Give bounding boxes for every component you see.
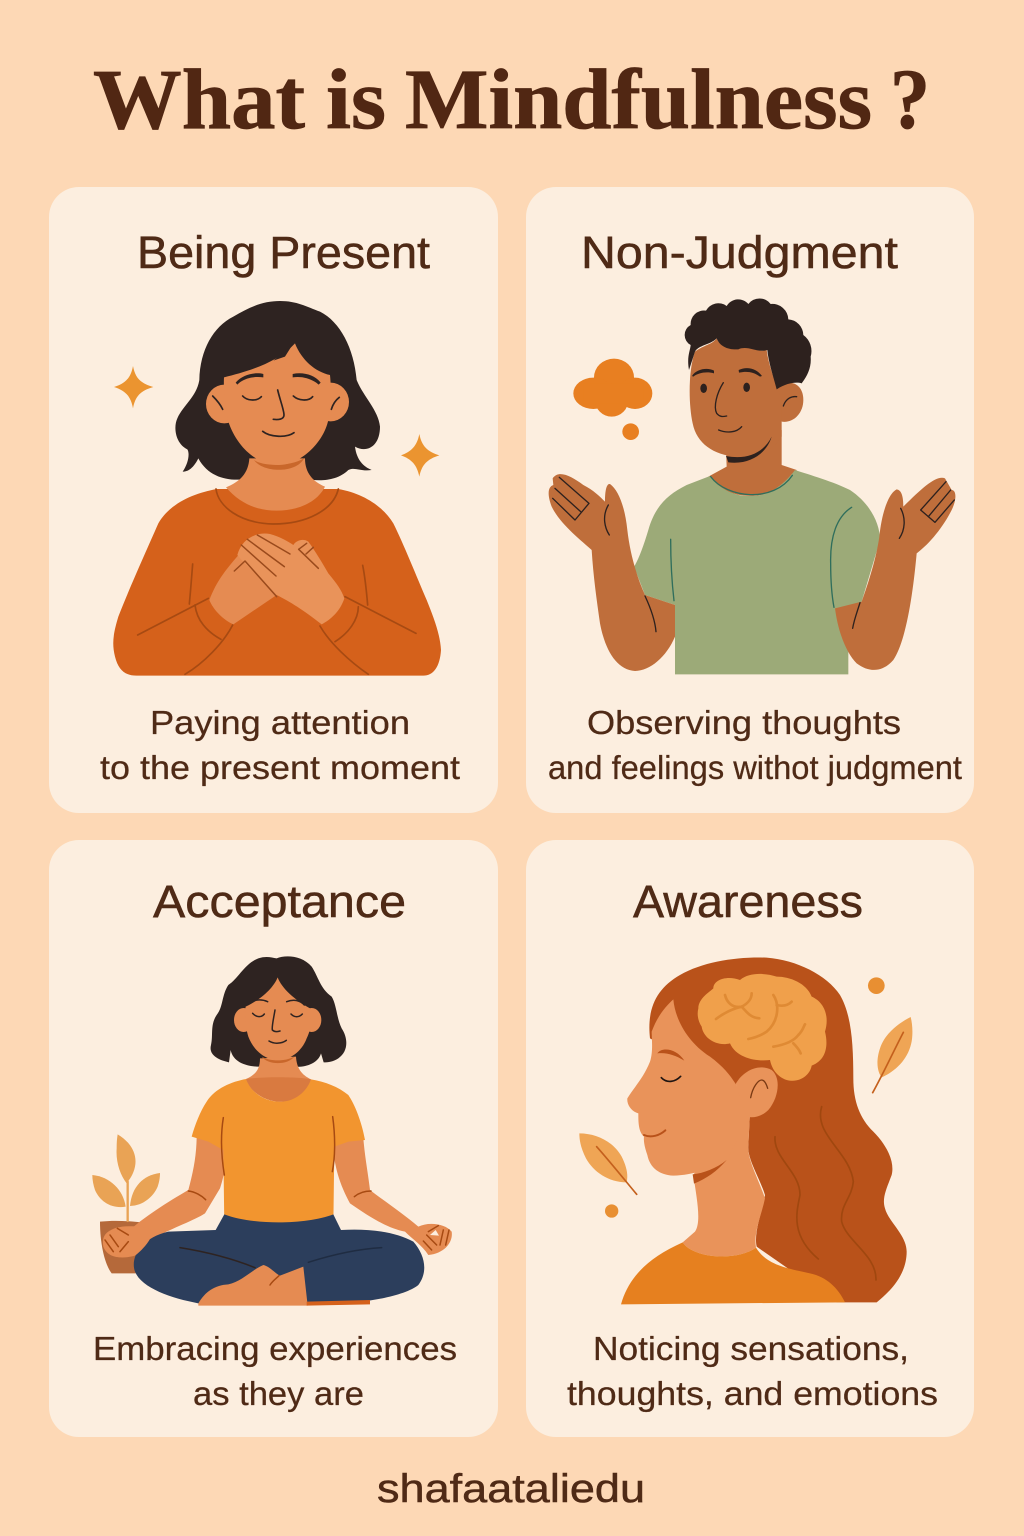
footer credit: shafaataliedu	[377, 1467, 645, 1511]
description: Non-Judgment	[548, 704, 962, 786]
panel: Being Present	[49, 187, 498, 813]
icon: dots and leaves	[579, 977, 912, 1218]
icon: potted plant	[92, 1134, 160, 1273]
heading: Being Present: Being Present	[137, 227, 431, 278]
description: Being Present: Paying attention	[150, 704, 410, 741]
description: Acceptance: as they are	[193, 1375, 364, 1412]
description: Being Present: to the present moment	[100, 749, 460, 786]
heading: Acceptance: Acceptance	[153, 876, 406, 927]
panel: Non-Judgment	[526, 187, 974, 813]
title: What	[93, 51, 305, 147]
description: Being Present	[100, 704, 460, 786]
illustration: profile with brain	[579, 958, 912, 1304]
icon: sparkles	[114, 366, 439, 477]
description: Acceptance	[93, 1330, 457, 1412]
title: ?	[890, 51, 930, 147]
description: Non-Judgment: Observing thoughts	[587, 704, 901, 741]
heading: Non-Judgment: Non-Judgment	[581, 227, 899, 278]
icon: brain	[698, 974, 827, 1081]
description: Awareness: thoughts, and emotions	[567, 1375, 938, 1412]
illustration: man with open palms	[549, 298, 955, 674]
panel: Awareness	[526, 840, 974, 1437]
icon: thought cloud	[573, 359, 652, 440]
illustration: seated meditation	[92, 956, 452, 1306]
illustration: woman with hands on heart	[113, 301, 441, 676]
description: Awareness: Noticing sensations,	[593, 1330, 909, 1367]
heading: Awareness: Awareness	[633, 876, 863, 927]
description: Non-Judgment: and feelings withot judgment	[548, 749, 962, 786]
description: Acceptance: Embracing experiences	[93, 1330, 457, 1367]
description: Awareness	[567, 1330, 938, 1412]
icon: hands on heart	[209, 534, 344, 624]
title	[93, 51, 930, 147]
title: is	[326, 51, 386, 147]
title: Mindfulness	[405, 51, 872, 147]
panel: Acceptance	[49, 840, 498, 1437]
icon: left hand	[103, 1226, 152, 1258]
